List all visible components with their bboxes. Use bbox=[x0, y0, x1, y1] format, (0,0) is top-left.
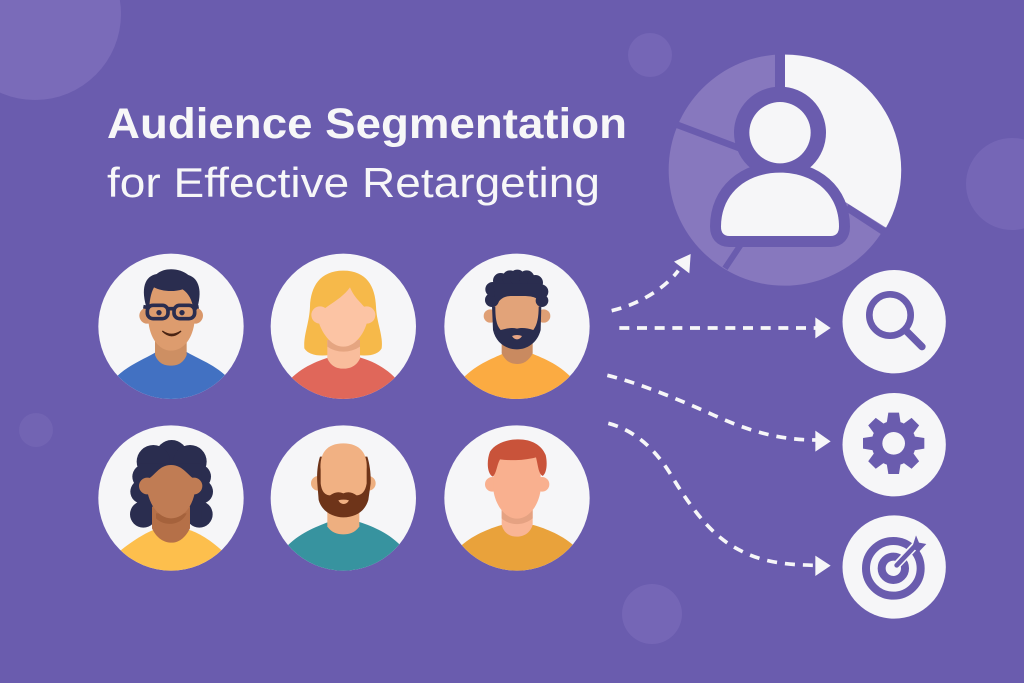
heading line 2: for Effective Retargeting bbox=[107, 159, 600, 206]
heading line 1: Audience Segmentation bbox=[107, 100, 627, 148]
segmentation pie chart bbox=[669, 50, 901, 286]
avatar: balding man with brown beard bbox=[271, 425, 416, 577]
icon: gear bbox=[842, 393, 946, 496]
avatar: man with glasses bbox=[98, 254, 244, 403]
title bbox=[107, 100, 627, 206]
arrow to search icon bbox=[619, 317, 831, 338]
avatar: woman with dark curly hair bbox=[98, 425, 244, 577]
avatar: man with red hair bbox=[444, 425, 590, 575]
arrow to pie chart bbox=[612, 254, 691, 311]
icon: target with dart bbox=[842, 515, 946, 619]
pie segments bbox=[669, 54, 900, 286]
person icon bbox=[721, 87, 839, 236]
avatar: woman with blonde hair bbox=[271, 254, 416, 403]
icon: magnifying glass bbox=[842, 270, 946, 373]
avatar: man with curly hair and beard bbox=[444, 254, 590, 403]
arrows bbox=[607, 254, 831, 576]
highlighted segment bbox=[784, 55, 901, 228]
arrow to gear icon bbox=[607, 375, 831, 452]
arrow to target icon bbox=[608, 423, 831, 576]
